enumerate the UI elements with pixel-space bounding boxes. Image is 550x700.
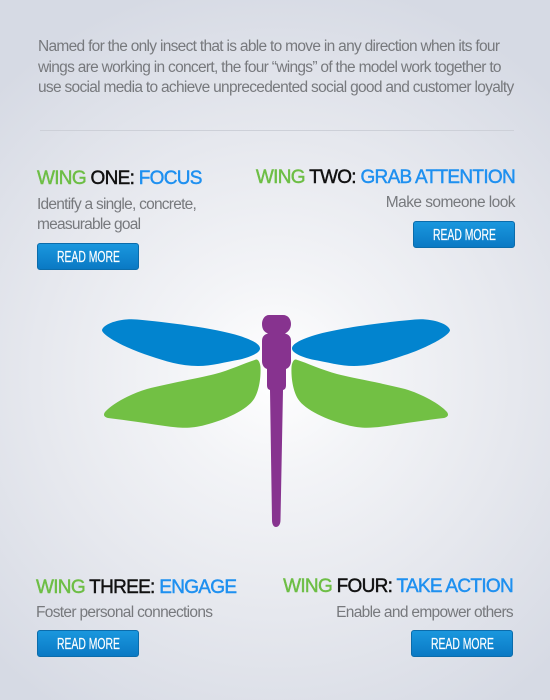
text: wing one: measurable goal xyxy=(37,216,140,233)
heading: wing two: WING TWO: GRAB ATTENTION xyxy=(256,167,515,188)
button: wing one: READ MORE xyxy=(57,249,119,266)
dragonfly illustration xyxy=(102,315,450,527)
button: wing four: READ MORE xyxy=(431,636,493,653)
heading: wing three: WING THREE: ENGAGE xyxy=(36,577,236,598)
button: wing two: READ MORE xyxy=(433,227,495,244)
intro paragraph: use social media to achieve unprecedented social good and customer loyalty xyxy=(38,79,514,96)
button: wing two xyxy=(413,221,515,248)
blue wing right xyxy=(292,319,450,366)
green wing right xyxy=(291,359,448,428)
intro paragraph: Named for the only insect that is able to move in any direction when its four xyxy=(38,38,499,55)
button: wing four xyxy=(411,630,513,657)
text: wing one xyxy=(37,196,196,233)
intro paragraph xyxy=(38,38,514,96)
heading: wing four: WING FOUR: TAKE ACTION xyxy=(283,576,513,597)
panel: wing four xyxy=(282,576,513,657)
button: wing three xyxy=(37,630,139,657)
blue wing left xyxy=(102,319,260,366)
panel: wing one xyxy=(36,168,202,270)
text: wing three: Foster personal connections xyxy=(36,604,212,621)
text: wing one: Identify a single, concrete, xyxy=(37,196,196,213)
panel: wing two xyxy=(256,167,516,248)
text: wing two: Make someone look xyxy=(386,194,515,211)
heading: wing one: WING ONE: FOCUS xyxy=(37,168,202,189)
green wing left xyxy=(104,359,261,428)
intro paragraph: wings are working in concert, the four “wings” of the model work together to xyxy=(38,58,501,76)
panel: wing three xyxy=(36,577,236,657)
body xyxy=(262,315,291,527)
button: wing three: READ MORE xyxy=(57,636,119,653)
text: wing four: Enable and empower others xyxy=(336,604,513,621)
button: wing one xyxy=(37,243,139,270)
